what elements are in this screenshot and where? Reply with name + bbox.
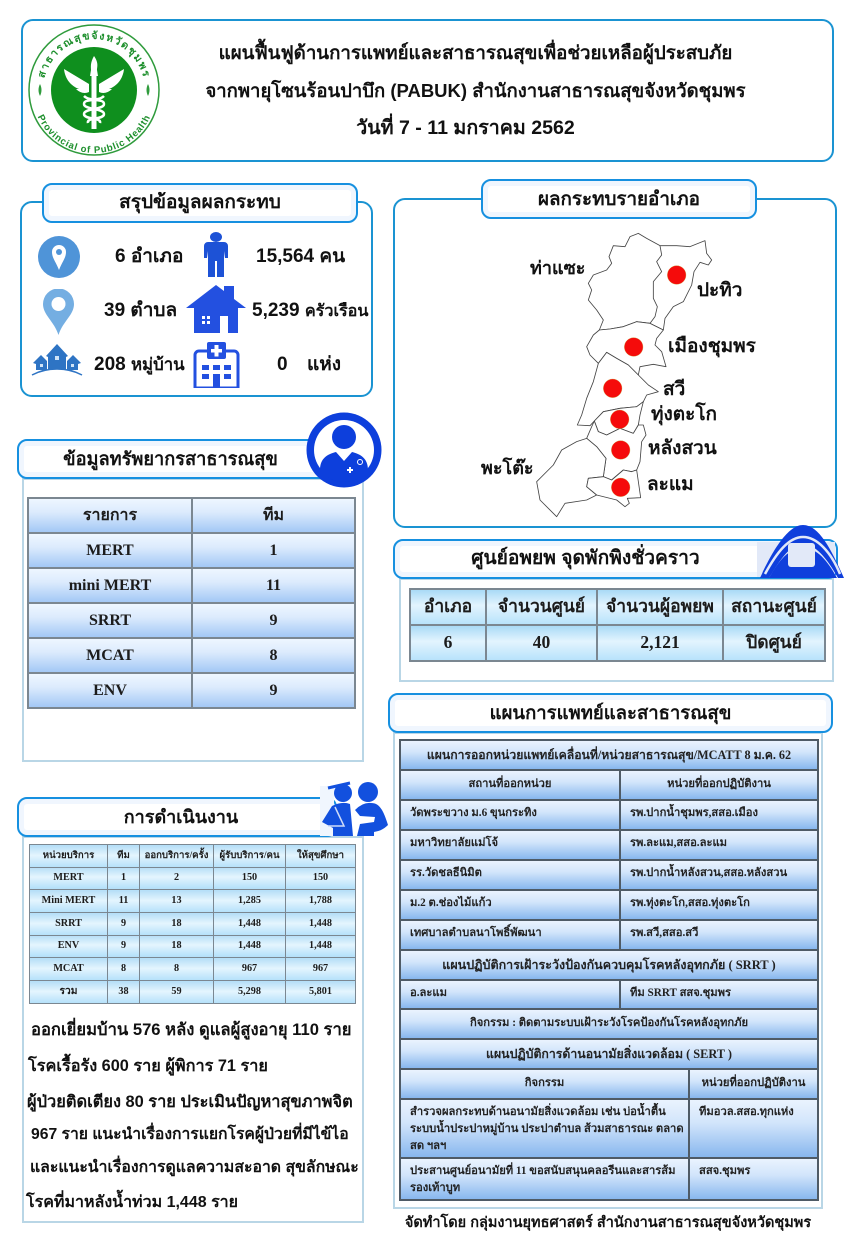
table: operations: 18 (171, 918, 182, 929)
panel: health resources (22, 478, 364, 762)
icon: person (204, 232, 228, 277)
table: shelters: อำเภอ (424, 596, 472, 616)
heading: impact summary (42, 183, 358, 223)
table: shelters: 2,121 (640, 632, 680, 652)
table: operations: ทีม (117, 850, 130, 861)
table: SERT environmental health plan: รองเท้าบูท (410, 1182, 460, 1194)
map label: Lamae: ละแม (647, 474, 694, 495)
icon: subdistrict pin (43, 289, 74, 335)
table: shelters: 40 (533, 632, 550, 652)
table: SRRT activity: อ.ละแม (410, 987, 447, 999)
table: health resources teams: ทีม (263, 506, 284, 524)
table: operations: 967 (242, 963, 257, 974)
heading: impact summary: สรุปข้อมูลผลกระทบ (119, 192, 281, 213)
icon: house (186, 285, 246, 333)
footer credit: จัดทำโดย กลุ่มงานยุทธศาสตร์ สำนักงานสาธารณสุขจังหวัดชุมพร (405, 1215, 811, 1231)
text block: operations summary: ออกเยี่ยมบ้าน 576 หลัง ดูแลผู้สูงอายุ 110 ราย (31, 1020, 352, 1039)
table: operations: MCAT (53, 963, 84, 974)
table: operations: 1,285 (238, 895, 261, 906)
table: operations: 1,448 (309, 918, 332, 929)
panel: header (21, 19, 834, 162)
icon: district pin (38, 236, 80, 278)
map label: Thung Tako: ทุ่งตะโก (651, 404, 717, 425)
table: operations: 38 (118, 986, 129, 997)
table: mobile medical unit plan (399, 739, 819, 979)
table: operations: 8 (174, 963, 179, 974)
map label: Pathio: ปะทิว (697, 280, 742, 301)
table: health resources teams (27, 497, 356, 709)
icon: tent (757, 525, 844, 578)
table: operations: 13 (171, 895, 182, 906)
table: mobile medical unit plan: เทศบาลตำบลนาโพธิ์พัฒนา (410, 927, 542, 939)
table: mobile medical unit plan: แผนปฏิบัติการเฝ้าระวังป้องกันควบคุมโรคหลังอุทกภัย ( SRRT ) (442, 958, 776, 972)
table: operations: 9 (121, 918, 126, 929)
map label: Phato: พะโต๊ะ (481, 458, 534, 478)
stat: facilities unit: แห่ง (307, 354, 341, 375)
table: SERT environmental health plan: ประสานศูนย์อนามัยที่ 11 ขอสนับสนุนคลอรีนและสารส้ม (410, 1165, 675, 1177)
stat: facilities: 0 (277, 354, 288, 375)
table: shelters: จำนวนผู้อพยพ (606, 596, 714, 616)
table: operations: 11 (119, 895, 128, 906)
table: mobile medical unit plan: ม.2 ต.ช่องไม้แก้ว (410, 897, 492, 909)
table: operations: ออกบริการ/ครั้ง (145, 850, 208, 861)
table: mobile medical unit plan: หน่วยที่ออกปฏิบัติงาน (667, 778, 771, 790)
table: operations: 59 (171, 986, 182, 997)
text block: operations summary (26, 1018, 359, 1211)
table: SERT environmental health plan: แผนปฏิบัติการด้านอนามัยสิ่งแวดล้อม ( SERT ) (486, 1047, 732, 1061)
heading: health resources (17, 439, 332, 479)
text block: operations summary: และแนะนำเรื่องการดูแลความสะอาด สุขลักษณะ (30, 1159, 359, 1176)
stat: villages: 208 หมู่บ้าน (94, 354, 185, 375)
heading: district impact: ผลกระทบรายอำเภอ (538, 188, 700, 209)
icon: village (32, 344, 82, 376)
panel: district impact (393, 198, 837, 528)
map label: Sawi: สวี (663, 379, 685, 400)
table: operations: 9 (121, 940, 126, 951)
table: mobile medical unit plan: วัดพระขวาง ม.6 ขุนกระทิง (410, 807, 537, 819)
table: operations: Mini MERT (42, 895, 95, 906)
table: operations: MERT (53, 872, 84, 883)
icon: injured patient and helper (320, 782, 388, 836)
table: operations: 18 (171, 940, 182, 951)
table: operations: 150 (242, 872, 257, 883)
heading: medical and public health plan (388, 693, 833, 733)
heading: shelters: ศูนย์อพยพ จุดพักพิงชั่วคราว (471, 548, 700, 569)
table: shelters (409, 588, 826, 662)
table: mobile medical unit plan: รพ.ทุ่งตะโก,สสอ.ทุ่งตะโก (630, 897, 750, 909)
title line 2: จากพายุโซนร้อนปาบึก (PABUK) สำนักงานสาธารณสุขจังหวัดชุมพร (205, 80, 746, 101)
table: SRRT activity: ทีม SRRT สสจ.ชุมพร (630, 987, 731, 999)
stat: districts: 6 อำเภอ (115, 246, 183, 267)
table: SERT environmental health plan: หน่วยที่ออกปฏิบัติงาน (702, 1077, 805, 1089)
table: shelters: สถานะศูนย์ (731, 596, 817, 616)
table: health resources teams: MCAT (86, 646, 134, 664)
table: operations: 1 (121, 872, 126, 883)
table: operations: 150 (313, 872, 328, 883)
table: mobile medical unit plan: มหาวิทยาลัยแม่โจ้ (410, 837, 498, 849)
table: operations: 5,298 (238, 986, 261, 997)
icon: provincial public health logo: สาธารณสุขจังหวัดชุมพร (39, 30, 149, 78)
map label: Tha Sae: ท่าแซะ (530, 258, 585, 278)
table: operations: 8 (121, 963, 126, 974)
map label: Mueang Chumphon: เมืองชุมพร (668, 336, 756, 357)
icon: provincial public health logo (28, 24, 160, 156)
table: shelters: ปิดศูนย์ (746, 632, 802, 652)
table: operations: 1,448 (238, 918, 261, 929)
table: health resources teams: SRRT (89, 612, 131, 628)
map label: Lang Suan: หลังสวน (648, 438, 717, 459)
heading: operations: การดำเนินงาน (124, 807, 238, 827)
text block: operations summary: โรคเรื้อรัง 600 ราย ผู้พิการ 71 ราย (28, 1057, 268, 1075)
panel: impact summary (20, 201, 373, 397)
text block: operations summary: โรคที่มาหลังน้ำท่วม 1,448 ราย (26, 1194, 238, 1211)
map: Chumphon districts (536, 232, 712, 518)
table: health resources teams: mini MERT (69, 576, 151, 594)
text block: operations summary: 967 ราย แนะนำเรื่องการแยกโรคผู้ป่วยที่มีไข้ไอ (31, 1126, 349, 1143)
table: operations: 2 (174, 872, 179, 883)
table: operations: 1,448 (309, 940, 332, 951)
panel: operations (22, 836, 364, 1223)
table: mobile medical unit plan: รพ.ละแม,สสอ.ละแม (630, 837, 727, 849)
table: health resources teams: 9 (270, 682, 278, 698)
table: operations: ให้สุขศึกษา (297, 850, 344, 861)
table: SERT environmental health plan: ระบบน้ำประปาหมู่บ้าน ประปาตำบล ส้วมสาธารณะ ตลาด (410, 1123, 684, 1135)
table: SERT environmental health plan: สสจ.ชุมพร (699, 1165, 750, 1177)
stat: households: 5,239 ครัวเรือน (252, 300, 368, 321)
table: operations: 1,448 (238, 940, 261, 951)
panel: medical and public health plan (393, 732, 823, 1209)
table: SERT environmental health plan: สำรวจผลกระทบด้านอนามัยสิ่งแวดล้อม เช่น บ่อน้ำตื้น (410, 1106, 666, 1118)
text block: operations summary: ผู้ป่วยติดเตียง 80 ราย ประเมินปัญหาสุขภาพจิต (27, 1093, 353, 1111)
table: health resources teams: รายการ (83, 506, 137, 524)
table: SERT environmental health plan: สด ฯลฯ (410, 1140, 446, 1152)
table: mobile medical unit plan: รร.วัดชลธีนิมิต (410, 867, 482, 879)
table: mobile medical unit plan: สถานที่ออกหน่วย (468, 778, 551, 790)
table: mobile medical unit plan: รพ.ปากน้ำชุมพร,สสอ.เมือง (630, 807, 758, 819)
heading: shelters (393, 539, 838, 579)
stat: subdistricts: 39 ตำบล (104, 300, 177, 321)
table: operations: 1,788 (309, 895, 332, 906)
table: SRRT activity (399, 981, 819, 1038)
table: mobile medical unit plan: รพ.ปากน้ำหลังสวน,สสอ.หลังสวน (630, 867, 787, 879)
title line 1: แผนฟื้นฟูด้านการแพทย์และสาธารณสุขเพื่อช่วยเหลือผู้ประสบภัย (219, 42, 732, 63)
table: health resources teams: 1 (270, 542, 278, 558)
table: health resources teams: MERT (86, 542, 134, 558)
table: operations: ENV (58, 940, 79, 951)
table: SERT environmental health plan: ทีมอวล.สสอ.ทุกแห่ง (699, 1106, 794, 1118)
icon: hospital (194, 342, 240, 388)
table: SERT environmental health plan (399, 1040, 819, 1201)
table: shelters: จำนวนศูนย์ (498, 596, 585, 616)
table: mobile medical unit plan: รพ.สวี,สสอ.สวี (630, 927, 698, 939)
table: health resources teams: 9 (270, 612, 278, 628)
panel: shelters (399, 578, 834, 682)
table: SRRT activity: กิจกรรม : ติดตามระบบเฝ้าระวังโรคป้องกันโรคหลังอุทกภัย (470, 1017, 748, 1029)
table: operations: หน่วยบริการ (43, 850, 94, 861)
table: operations (29, 844, 356, 1004)
table: health resources teams: 11 (266, 576, 281, 594)
table: operations: ผู้รับบริการ/คน (219, 850, 280, 861)
table: operations: 967 (313, 963, 328, 974)
table: health resources teams: ENV (93, 682, 127, 698)
table: SERT environmental health plan: กิจกรรม (525, 1077, 564, 1089)
table: shelters: 6 (444, 632, 452, 652)
table: operations: รวม (60, 986, 77, 997)
table: operations: 5,801 (309, 986, 332, 997)
table: operations: SRRT (55, 918, 82, 929)
icon: provincial public health logo: Provincial of Public Health (38, 114, 150, 153)
heading: operations (17, 797, 337, 837)
heading: district impact (481, 179, 757, 219)
title line 3: วันที่ 7 - 11 มกราคม 2562 (356, 117, 575, 139)
icon: doctor (306, 412, 382, 488)
table: mobile medical unit plan: แผนการออกหน่วยแพทย์เคลื่อนที่/หน่วยสาธารณสุข/MCATT 8 ม.ค. 62 (427, 748, 791, 762)
table: health resources teams: 8 (270, 646, 278, 664)
heading: health resources: ข้อมูลทรัพยากรสาธารณสุข (63, 449, 278, 469)
heading: medical and public health plan: แผนการแพทย์และสาธารณสุข (490, 702, 731, 723)
stat: people: 15,564 คน (256, 246, 345, 267)
